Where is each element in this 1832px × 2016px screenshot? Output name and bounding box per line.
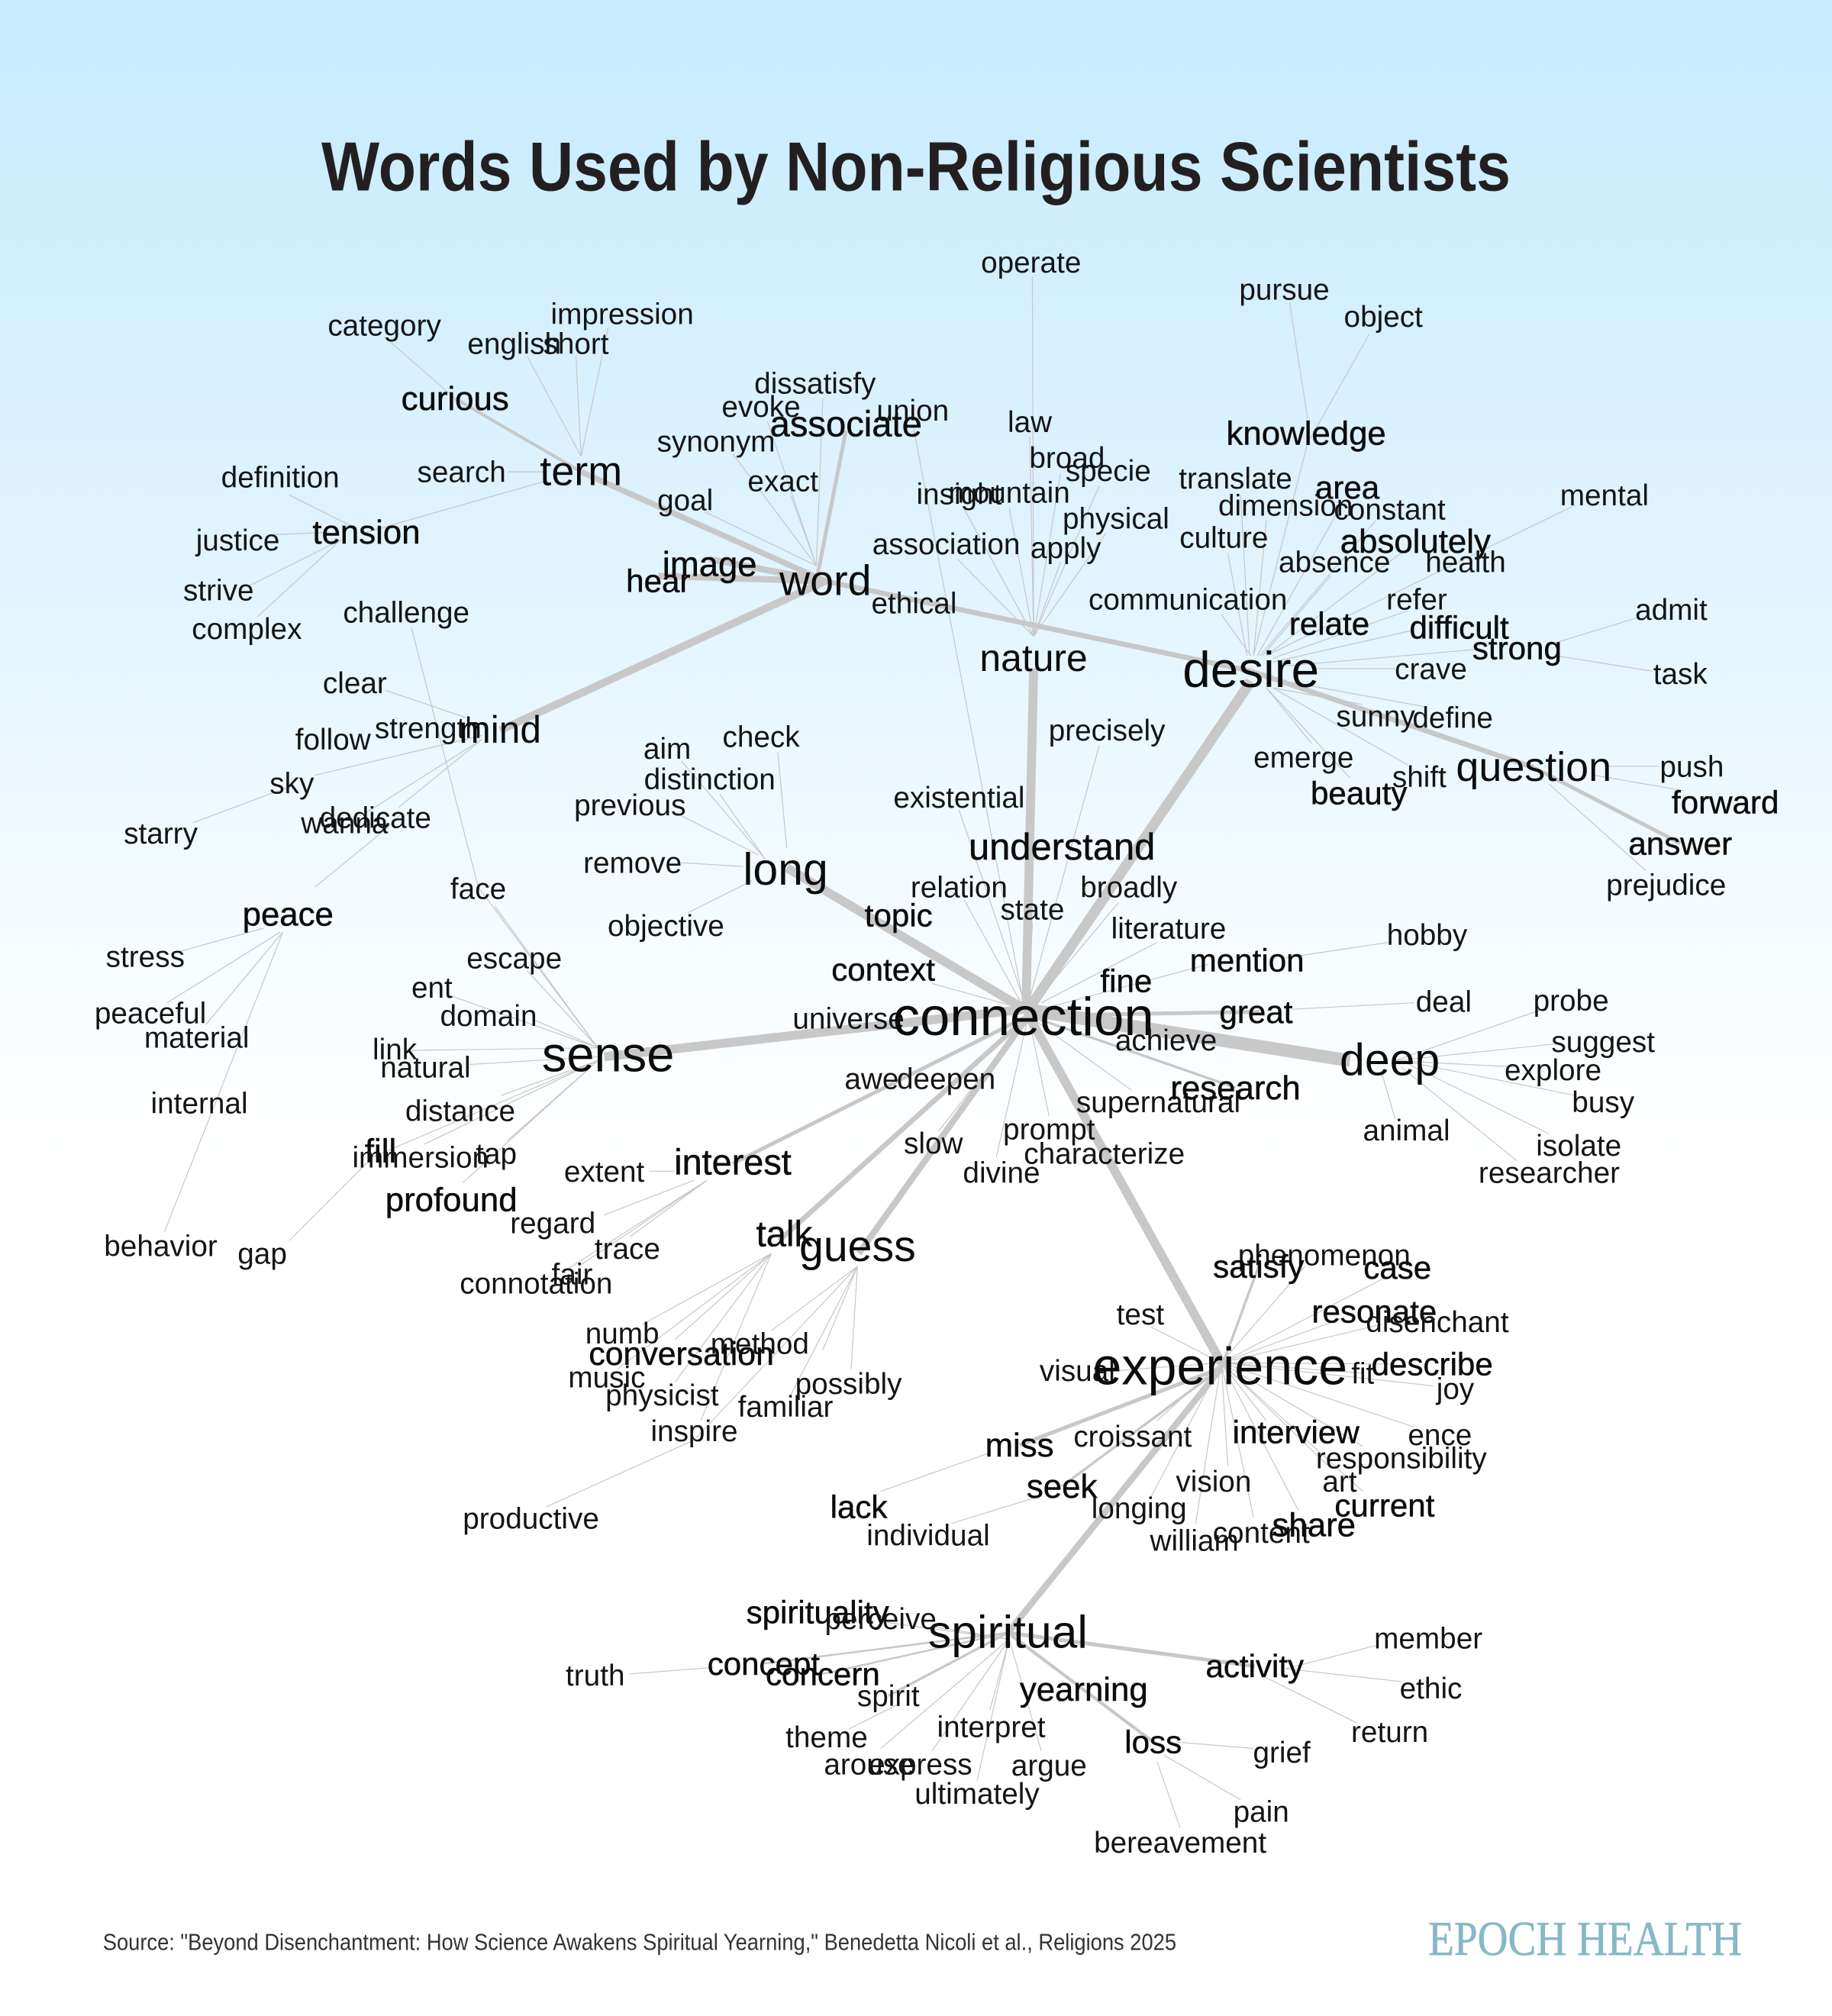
word cluster: sense: natural xyxy=(380,1051,471,1084)
word cluster: desire: knowledge xyxy=(1227,415,1386,453)
word cluster: connection: slow xyxy=(904,1127,963,1160)
word cluster: deep: animal xyxy=(1363,1114,1450,1147)
word cluster: term: strive xyxy=(183,575,254,608)
word cluster: word: dissatisfy xyxy=(754,367,876,400)
word cluster: interest, talk and guess: guess xyxy=(799,1222,916,1271)
word cluster: term: justice xyxy=(195,524,279,557)
word cluster: question: forward xyxy=(1672,784,1779,820)
word cluster: sense: sense xyxy=(542,1026,674,1082)
word cluster: interest, talk and guess: connotation xyxy=(460,1267,612,1300)
word cluster: desire: translate xyxy=(1179,463,1292,495)
word cluster: nature: specie xyxy=(1066,455,1151,488)
word cluster: long: check xyxy=(722,721,800,754)
word cluster: spiritual: ultimately xyxy=(914,1778,1040,1811)
word cluster: connection: deepen xyxy=(897,1063,995,1096)
word cluster: deep: probe xyxy=(1534,985,1609,1018)
word cluster: peace: material xyxy=(144,1022,250,1055)
word cluster: connection: topic xyxy=(865,898,933,934)
word cluster: deep: suggest xyxy=(1551,1026,1655,1059)
word cluster: mind: mind xyxy=(459,708,541,751)
word cluster: spiritual xyxy=(566,1594,1482,1860)
word cluster: desire: task xyxy=(1653,658,1708,691)
word cluster: desire: difficult xyxy=(1409,609,1509,645)
word cluster: connection: precisely xyxy=(1049,714,1166,747)
word cluster: deep: deep xyxy=(1340,1035,1440,1085)
word cluster: interest, talk and guess: talk xyxy=(756,1214,812,1254)
word cluster: experience: case xyxy=(1363,1250,1431,1285)
word cluster: connection: divine xyxy=(963,1157,1040,1190)
word cluster: term: category xyxy=(327,310,441,343)
word cluster: spiritual: spirituality xyxy=(747,1594,889,1630)
word cluster: interest, talk and guess: familiar xyxy=(738,1391,834,1424)
word cluster: experience xyxy=(831,1239,1509,1557)
word cluster: desire: emerge xyxy=(1253,742,1353,775)
word cluster: long: previous xyxy=(574,789,685,822)
word cluster: long: remove xyxy=(583,847,682,880)
word cluster: interest, talk and guess: numb xyxy=(585,1318,660,1350)
word cluster: sense: fill xyxy=(365,1132,396,1169)
word cluster: mind: follow xyxy=(295,724,372,756)
title: Words Used by Non-Religious Scientists xyxy=(321,129,1511,206)
source note: Source: "Beyond Disenchantment: How Science Awakens Spiritual Yearning," Benedetta Nicoli et al., Religions 2025 xyxy=(103,1931,1176,1956)
word cluster: desire: absence xyxy=(1279,547,1390,579)
word cluster: word: exact xyxy=(747,465,818,498)
word cluster: spiritual: arouse xyxy=(824,1748,914,1781)
word cluster: interest, talk and guess: trace xyxy=(595,1233,660,1266)
word cluster: experience: seek xyxy=(1027,1468,1097,1505)
word cluster: spiritual: concept xyxy=(708,1646,820,1682)
word cluster: connection: achieve xyxy=(1115,1024,1217,1057)
word cluster: experience: lack xyxy=(831,1489,888,1524)
word cluster: desire: communication xyxy=(1089,583,1287,616)
word cluster: experience: vision xyxy=(1176,1466,1251,1498)
word cluster: sense: tap xyxy=(476,1137,517,1170)
word cluster: experience: phenomenon xyxy=(1238,1239,1411,1272)
word cluster: long xyxy=(574,721,828,943)
word cluster: spiritual: grief xyxy=(1253,1737,1311,1769)
word cluster: connection: state xyxy=(1000,893,1064,926)
word cluster: word: associate xyxy=(770,404,922,444)
word cluster: nature: operate xyxy=(981,247,1081,279)
word cluster: experience: disenchant xyxy=(1366,1306,1509,1339)
word cluster: mind: sky xyxy=(269,767,314,800)
word cluster: connection: understand xyxy=(969,827,1155,868)
word cluster: question xyxy=(1456,744,1779,902)
word cluster: connection: mention xyxy=(1190,943,1305,979)
word cluster: desire: crave xyxy=(1395,653,1467,685)
word cluster: interest, talk and guess: productive xyxy=(463,1503,599,1536)
word cluster: peace: gap xyxy=(237,1238,287,1271)
word cluster: mind xyxy=(124,596,541,850)
word cluster: spiritual: perceive xyxy=(825,1603,937,1636)
word cluster: deep: explore xyxy=(1505,1054,1601,1087)
word cluster: word: synonym xyxy=(657,425,776,458)
word cluster: desire: strong xyxy=(1472,630,1562,666)
word cluster: desire: absolutely xyxy=(1340,523,1491,560)
word cluster: question: push xyxy=(1659,750,1724,783)
word cluster: term: complex xyxy=(192,613,302,646)
word cluster: interest, talk and guess: inspire xyxy=(650,1415,738,1448)
word cluster: question: prejudice xyxy=(1606,869,1726,902)
word cluster: spiritual: argue xyxy=(1011,1750,1087,1782)
word cluster: connection: literature xyxy=(1111,913,1226,946)
word cluster: connection: supernatural xyxy=(1076,1086,1240,1119)
word cluster: interest, talk and guess: method xyxy=(711,1328,809,1361)
word cluster: term: curious xyxy=(402,380,509,418)
word cluster: connection: awe xyxy=(844,1063,898,1096)
word cluster: experience: longing xyxy=(1092,1492,1187,1525)
word cluster: interest, talk and guess: fair xyxy=(552,1259,592,1292)
word cluster: question: question xyxy=(1456,744,1611,790)
word cluster: desire: area xyxy=(1315,469,1380,505)
word cluster: nature xyxy=(872,247,1169,679)
word cluster: word: hear xyxy=(626,563,690,599)
word cluster: desire: pursue xyxy=(1239,274,1330,307)
word cluster: long: long xyxy=(743,845,828,895)
word cluster: peace: peaceful xyxy=(95,998,206,1031)
word cluster: experience: interview xyxy=(1233,1414,1359,1450)
word cluster: experience: ence xyxy=(1408,1419,1472,1452)
word cluster: desire: mental xyxy=(1560,479,1649,512)
word cluster: experience: resonate xyxy=(1312,1293,1437,1329)
word cluster: desire: beauty xyxy=(1311,776,1407,811)
word cluster: mind: clear xyxy=(323,667,387,700)
word cluster: term: impression xyxy=(551,298,694,331)
word cluster: connection: deal xyxy=(1416,986,1472,1019)
word cluster: connection: broadly xyxy=(1080,872,1178,905)
word cluster: word xyxy=(626,367,949,604)
word cluster: interest, talk and guess: music xyxy=(568,1361,646,1394)
word cluster: experience: share xyxy=(1272,1506,1356,1543)
word cluster: question: answer xyxy=(1628,825,1732,861)
word cluster: peace: stress xyxy=(106,941,185,974)
word cluster: experience: joy xyxy=(1436,1373,1475,1406)
word cluster: desire: constant xyxy=(1334,494,1446,527)
word cluster: interest, talk and guess: physicist xyxy=(605,1379,719,1412)
word cluster: spiritual: activity xyxy=(1205,1648,1304,1684)
word cluster: connection: great xyxy=(1219,994,1293,1030)
word cluster: spiritual: yearning xyxy=(1020,1671,1148,1708)
word cluster: experience: fit xyxy=(1351,1357,1375,1390)
word cluster: peace xyxy=(95,895,334,1271)
word cluster: long: objective xyxy=(608,910,724,943)
word cluster: connection: fine xyxy=(1100,963,1152,999)
word cluster: term: term xyxy=(540,449,622,495)
word cluster: experience: miss xyxy=(985,1427,1054,1464)
word cluster: desire: shift xyxy=(1392,761,1447,794)
word cluster: nature: ethical xyxy=(872,587,956,620)
word cluster: mind: strength xyxy=(375,712,482,745)
word cluster: sense: immersion xyxy=(352,1141,489,1174)
word cluster: mind: dedicate xyxy=(320,802,431,835)
word cluster: spiritual: concern xyxy=(766,1656,880,1692)
word cluster: deep: researcher xyxy=(1479,1157,1620,1190)
word cluster: interest, talk and guess: possibly xyxy=(795,1368,902,1401)
word cluster: long: distinction xyxy=(644,763,776,796)
word cluster: term: definition xyxy=(221,461,340,494)
word cluster: desire: refer xyxy=(1386,583,1447,616)
word cluster: connection: connection xyxy=(893,986,1154,1047)
word cluster: desire: define xyxy=(1412,702,1493,734)
word cluster: sense: domain xyxy=(440,1000,537,1033)
word cluster: sense: link xyxy=(373,1034,418,1066)
word cluster: experience: current xyxy=(1334,1488,1435,1524)
word cluster: experience: satisfy xyxy=(1213,1248,1304,1284)
word cluster: term: english xyxy=(467,327,561,360)
word cluster: desire: desire xyxy=(1182,642,1319,698)
word cluster: spiritual: loss xyxy=(1124,1724,1182,1760)
thin leaf edges xyxy=(165,276,1684,1828)
word cluster: connection: existential xyxy=(893,782,1025,814)
word cluster: word: union xyxy=(876,395,949,427)
word cluster: experience: content xyxy=(1213,1517,1310,1550)
word cluster: peace: peace xyxy=(243,895,334,933)
word cluster: connection: characterize xyxy=(1024,1137,1185,1170)
word cluster: term: short xyxy=(543,327,609,360)
word cluster: sense: escape xyxy=(466,942,562,975)
word cluster: long: aim xyxy=(643,733,691,766)
word cluster: nature: broad xyxy=(1029,442,1105,475)
word cluster: sense: profound xyxy=(385,1181,518,1218)
word cluster: experience: william xyxy=(1150,1524,1239,1557)
word cluster: experience: art xyxy=(1322,1466,1357,1498)
word cluster: desire: health xyxy=(1425,547,1506,579)
word cluster: connection: hobby xyxy=(1387,919,1468,952)
word cluster: desire xyxy=(1089,274,1708,811)
word cluster: sense: ent xyxy=(411,972,453,1005)
word cluster: spiritual: return xyxy=(1351,1716,1428,1749)
word cluster: connection: context xyxy=(831,951,935,987)
word cluster: nature: insight xyxy=(916,478,1002,511)
word cluster: connection xyxy=(792,714,1472,1190)
word cluster: word: evoke xyxy=(721,391,801,424)
word cluster: spiritual: spirit xyxy=(857,1680,920,1713)
word cluster: desire: sunny xyxy=(1336,701,1415,734)
word cluster: word: image xyxy=(663,545,757,584)
word cluster: word: word xyxy=(779,556,871,604)
word cluster: term xyxy=(183,298,694,646)
word cluster: connection: relation xyxy=(911,872,1008,905)
word cluster: spiritual: ethic xyxy=(1400,1672,1462,1705)
word cluster: spiritual: interpret xyxy=(937,1711,1046,1743)
word cluster: interest, talk and guess: conversation xyxy=(589,1336,774,1372)
word cluster: peace: behavior xyxy=(104,1231,218,1263)
word cluster: deep xyxy=(1340,985,1655,1190)
word cluster: experience: test xyxy=(1117,1298,1164,1331)
word cluster: deep: isolate xyxy=(1536,1130,1621,1163)
thick trunk edges xyxy=(455,398,1680,1742)
word cluster: nature: apply xyxy=(1030,532,1101,565)
word cluster: deep: busy xyxy=(1572,1086,1635,1119)
word cluster: interest, talk and guess: regard xyxy=(510,1207,595,1240)
word cluster: mind: challenge xyxy=(343,596,469,629)
logo: Epoch Health: EPOCH HEALTH xyxy=(1428,1911,1742,1966)
word cluster: connection: prompt xyxy=(1003,1113,1095,1146)
word cluster: nature: mountain xyxy=(948,477,1070,510)
word cluster: experience: experience xyxy=(1092,1337,1347,1395)
word cluster: interest, talk and guess: interest xyxy=(674,1142,792,1182)
word cluster: interest, talk and guess xyxy=(460,1142,916,1536)
word cluster: nature: association xyxy=(872,528,1020,561)
word cluster: desire: admit xyxy=(1635,594,1708,627)
word cluster: experience: visual xyxy=(1040,1355,1115,1388)
word cluster: term: tension xyxy=(312,514,421,551)
word cluster: sense xyxy=(352,873,674,1218)
word cluster: spiritual: pain xyxy=(1234,1796,1289,1829)
word cluster: term: search xyxy=(418,456,506,489)
word cluster: mind: starry xyxy=(124,818,198,850)
word cluster: experience: responsibility xyxy=(1316,1442,1487,1475)
word cluster: word: goal xyxy=(657,485,713,518)
word cluster: nature: nature xyxy=(979,637,1088,679)
word cluster: spiritual: bereavement xyxy=(1094,1827,1266,1860)
word cluster: desire: relate xyxy=(1289,605,1369,641)
word cluster: sense: face xyxy=(450,873,506,905)
word cluster: connection: research xyxy=(1170,1069,1301,1107)
word cluster: sense: distance xyxy=(405,1095,515,1128)
word cluster: connection: universe xyxy=(792,1002,905,1035)
word cluster: experience: describe xyxy=(1372,1346,1493,1382)
word cluster: experience: croissant xyxy=(1073,1421,1192,1453)
word cluster: spiritual: truth xyxy=(566,1660,625,1692)
word cluster: nature: law xyxy=(1008,406,1053,439)
word cluster: spiritual: theme xyxy=(785,1721,868,1754)
word cluster: spiritual: spiritual xyxy=(928,1605,1088,1657)
word cluster: interest, talk and guess: extent xyxy=(564,1156,645,1189)
word cluster: nature: physical xyxy=(1063,502,1169,535)
word cluster: spiritual: member xyxy=(1374,1622,1482,1655)
word cluster: experience: individual xyxy=(866,1520,990,1553)
word cluster: mind: wanna xyxy=(300,807,389,840)
word cluster: peace: internal xyxy=(151,1088,248,1121)
word cluster: desire: dimension xyxy=(1218,489,1353,522)
word cluster: spiritual: express xyxy=(869,1748,972,1781)
word cluster: desire: culture xyxy=(1179,522,1268,555)
word cluster: desire: object xyxy=(1344,301,1423,334)
